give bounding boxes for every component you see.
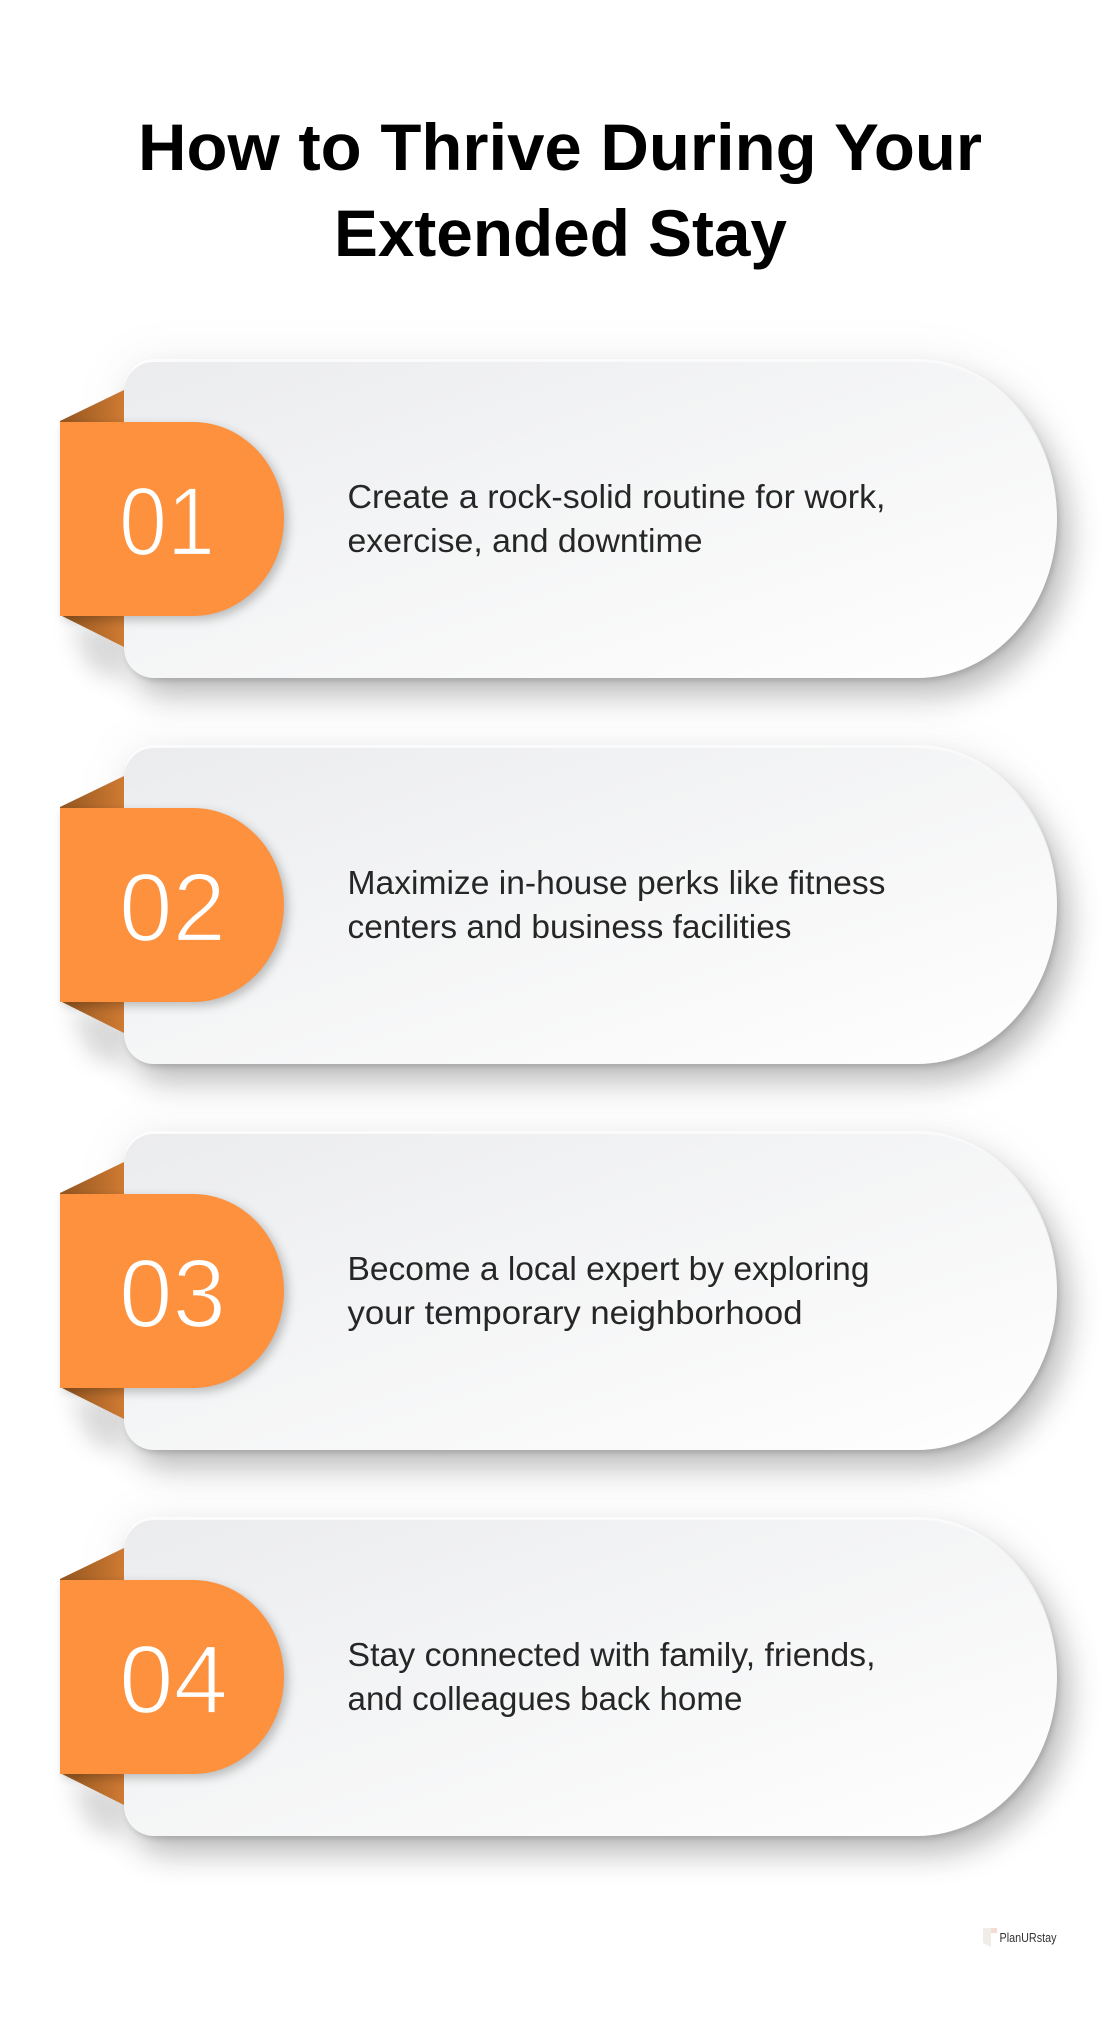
panel: step 03: 03 bbox=[119, 1239, 226, 1348]
panel: step 02 bbox=[60, 745, 1069, 1082]
logo: PlanURstay: PlanURstay bbox=[1000, 1930, 1057, 1945]
panel: step 04: and colleagues back home bbox=[348, 1680, 742, 1717]
panel: step 02: Maximize in-house perks like fitness bbox=[348, 864, 886, 901]
panel: step 04: Stay connected with family, friends, bbox=[348, 1636, 876, 1673]
title: How to Thrive During Your bbox=[138, 110, 982, 184]
panel: step 02: centers and business facilities bbox=[348, 908, 792, 945]
panel: step 03: Become a local expert by exploring bbox=[348, 1250, 870, 1287]
panel: step 01 bbox=[60, 359, 1069, 696]
panel: step 02: 02 bbox=[119, 853, 226, 962]
panel: step 01: 01 bbox=[119, 467, 215, 576]
panel: step 04 bbox=[60, 1517, 1069, 1854]
logo: PlanURstay bbox=[983, 1928, 1057, 1947]
panel: step 01: exercise, and downtime bbox=[348, 522, 702, 559]
panel: step 03: your temporary neighborhood bbox=[348, 1294, 802, 1331]
panel: step 03 bbox=[60, 1131, 1069, 1468]
panel: step 04: 04 bbox=[119, 1625, 228, 1734]
title bbox=[138, 110, 982, 270]
title: Extended Stay bbox=[334, 196, 787, 270]
panel: step 01: Create a rock-solid routine for work, bbox=[348, 478, 886, 515]
